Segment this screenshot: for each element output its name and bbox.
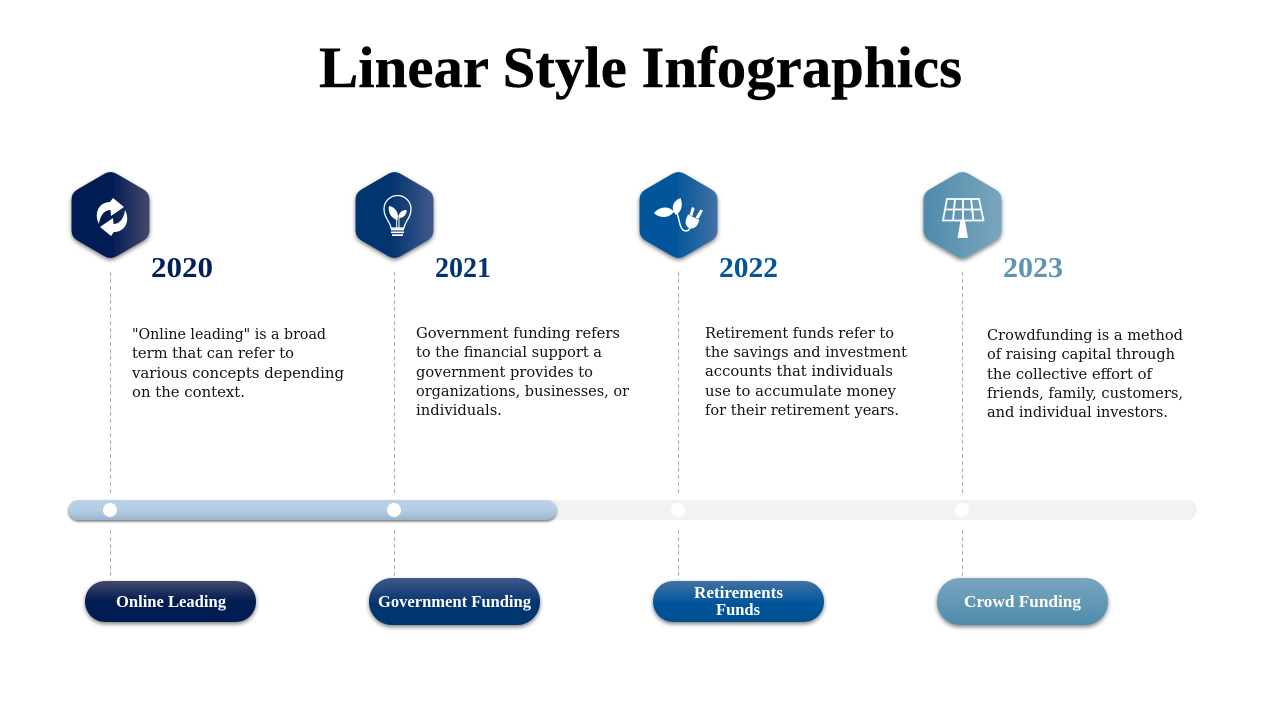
text block: retirement funds: Retirement funds refer to [705, 326, 894, 342]
pill: retirements funds: Retirements [694, 583, 784, 602]
hexagon: 2023 [924, 172, 1002, 258]
text block: retirement funds: the savings and investment [705, 345, 907, 361]
text block: retirement funds: use to accumulate money [705, 384, 897, 400]
hexagon: 2022 [640, 172, 718, 258]
text block: online leading: term that can refer to [132, 346, 294, 362]
text block: government funding [416, 326, 629, 419]
text block: online leading: on the context. [132, 385, 245, 401]
pill: retirements funds [653, 581, 824, 622]
timeline progress bar [68, 500, 556, 520]
icon: solar panel [943, 199, 984, 238]
text block: online leading: "Online leading" is a broad [132, 327, 326, 343]
timeline track [68, 500, 1197, 520]
year: 2020: 2020 [151, 252, 213, 284]
pill: crowd funding [937, 578, 1108, 625]
hexagon: 2020 [72, 172, 150, 258]
pill: government funding [369, 578, 540, 625]
hexagon: 2021 [356, 172, 434, 258]
year: 2023: 2023 [1003, 252, 1063, 284]
pill: retirements funds: Funds [716, 600, 761, 619]
icon: refresh arrows [97, 198, 127, 236]
pill: government funding: Government Funding [378, 592, 532, 611]
timeline markers [103, 503, 969, 517]
pill: online leading: Online Leading [116, 592, 227, 611]
text block: crowdfunding [987, 328, 1183, 421]
text block: crowdfunding: the collective effort of [987, 367, 1154, 383]
year: 2022: 2022 [719, 252, 778, 284]
pill: crowd funding: Crowd Funding [964, 592, 1082, 611]
column connector lines [110, 272, 962, 580]
text block: retirement funds [705, 326, 907, 419]
text block: government funding: Government funding refers [416, 326, 620, 342]
year: 2021: 2021 [435, 252, 491, 284]
text block: retirement funds: for their retirement years. [705, 403, 899, 419]
title: Linear Style Infographics [319, 35, 962, 100]
text block: government funding: to the financial support a [416, 345, 602, 361]
text block: retirement funds: accounts that individuals [705, 364, 893, 380]
text block: crowdfunding: friends, family, customers, [987, 386, 1183, 402]
text block: government funding: organizations, businesses, or [416, 384, 629, 400]
text block: crowdfunding: Crowdfunding is a method [987, 328, 1183, 344]
icon: leaves and plug [654, 198, 703, 231]
text block: government funding: government provides to [416, 365, 593, 381]
text block: crowdfunding: of raising capital through [987, 347, 1175, 363]
text block: government funding: individuals. [416, 403, 502, 419]
text block: crowdfunding: and individual investors. [987, 405, 1168, 421]
text block: online leading: various concepts depending [131, 366, 344, 382]
pill: online leading [85, 581, 256, 622]
icon: light bulb with plant [384, 196, 411, 235]
text block: online leading [131, 327, 344, 401]
